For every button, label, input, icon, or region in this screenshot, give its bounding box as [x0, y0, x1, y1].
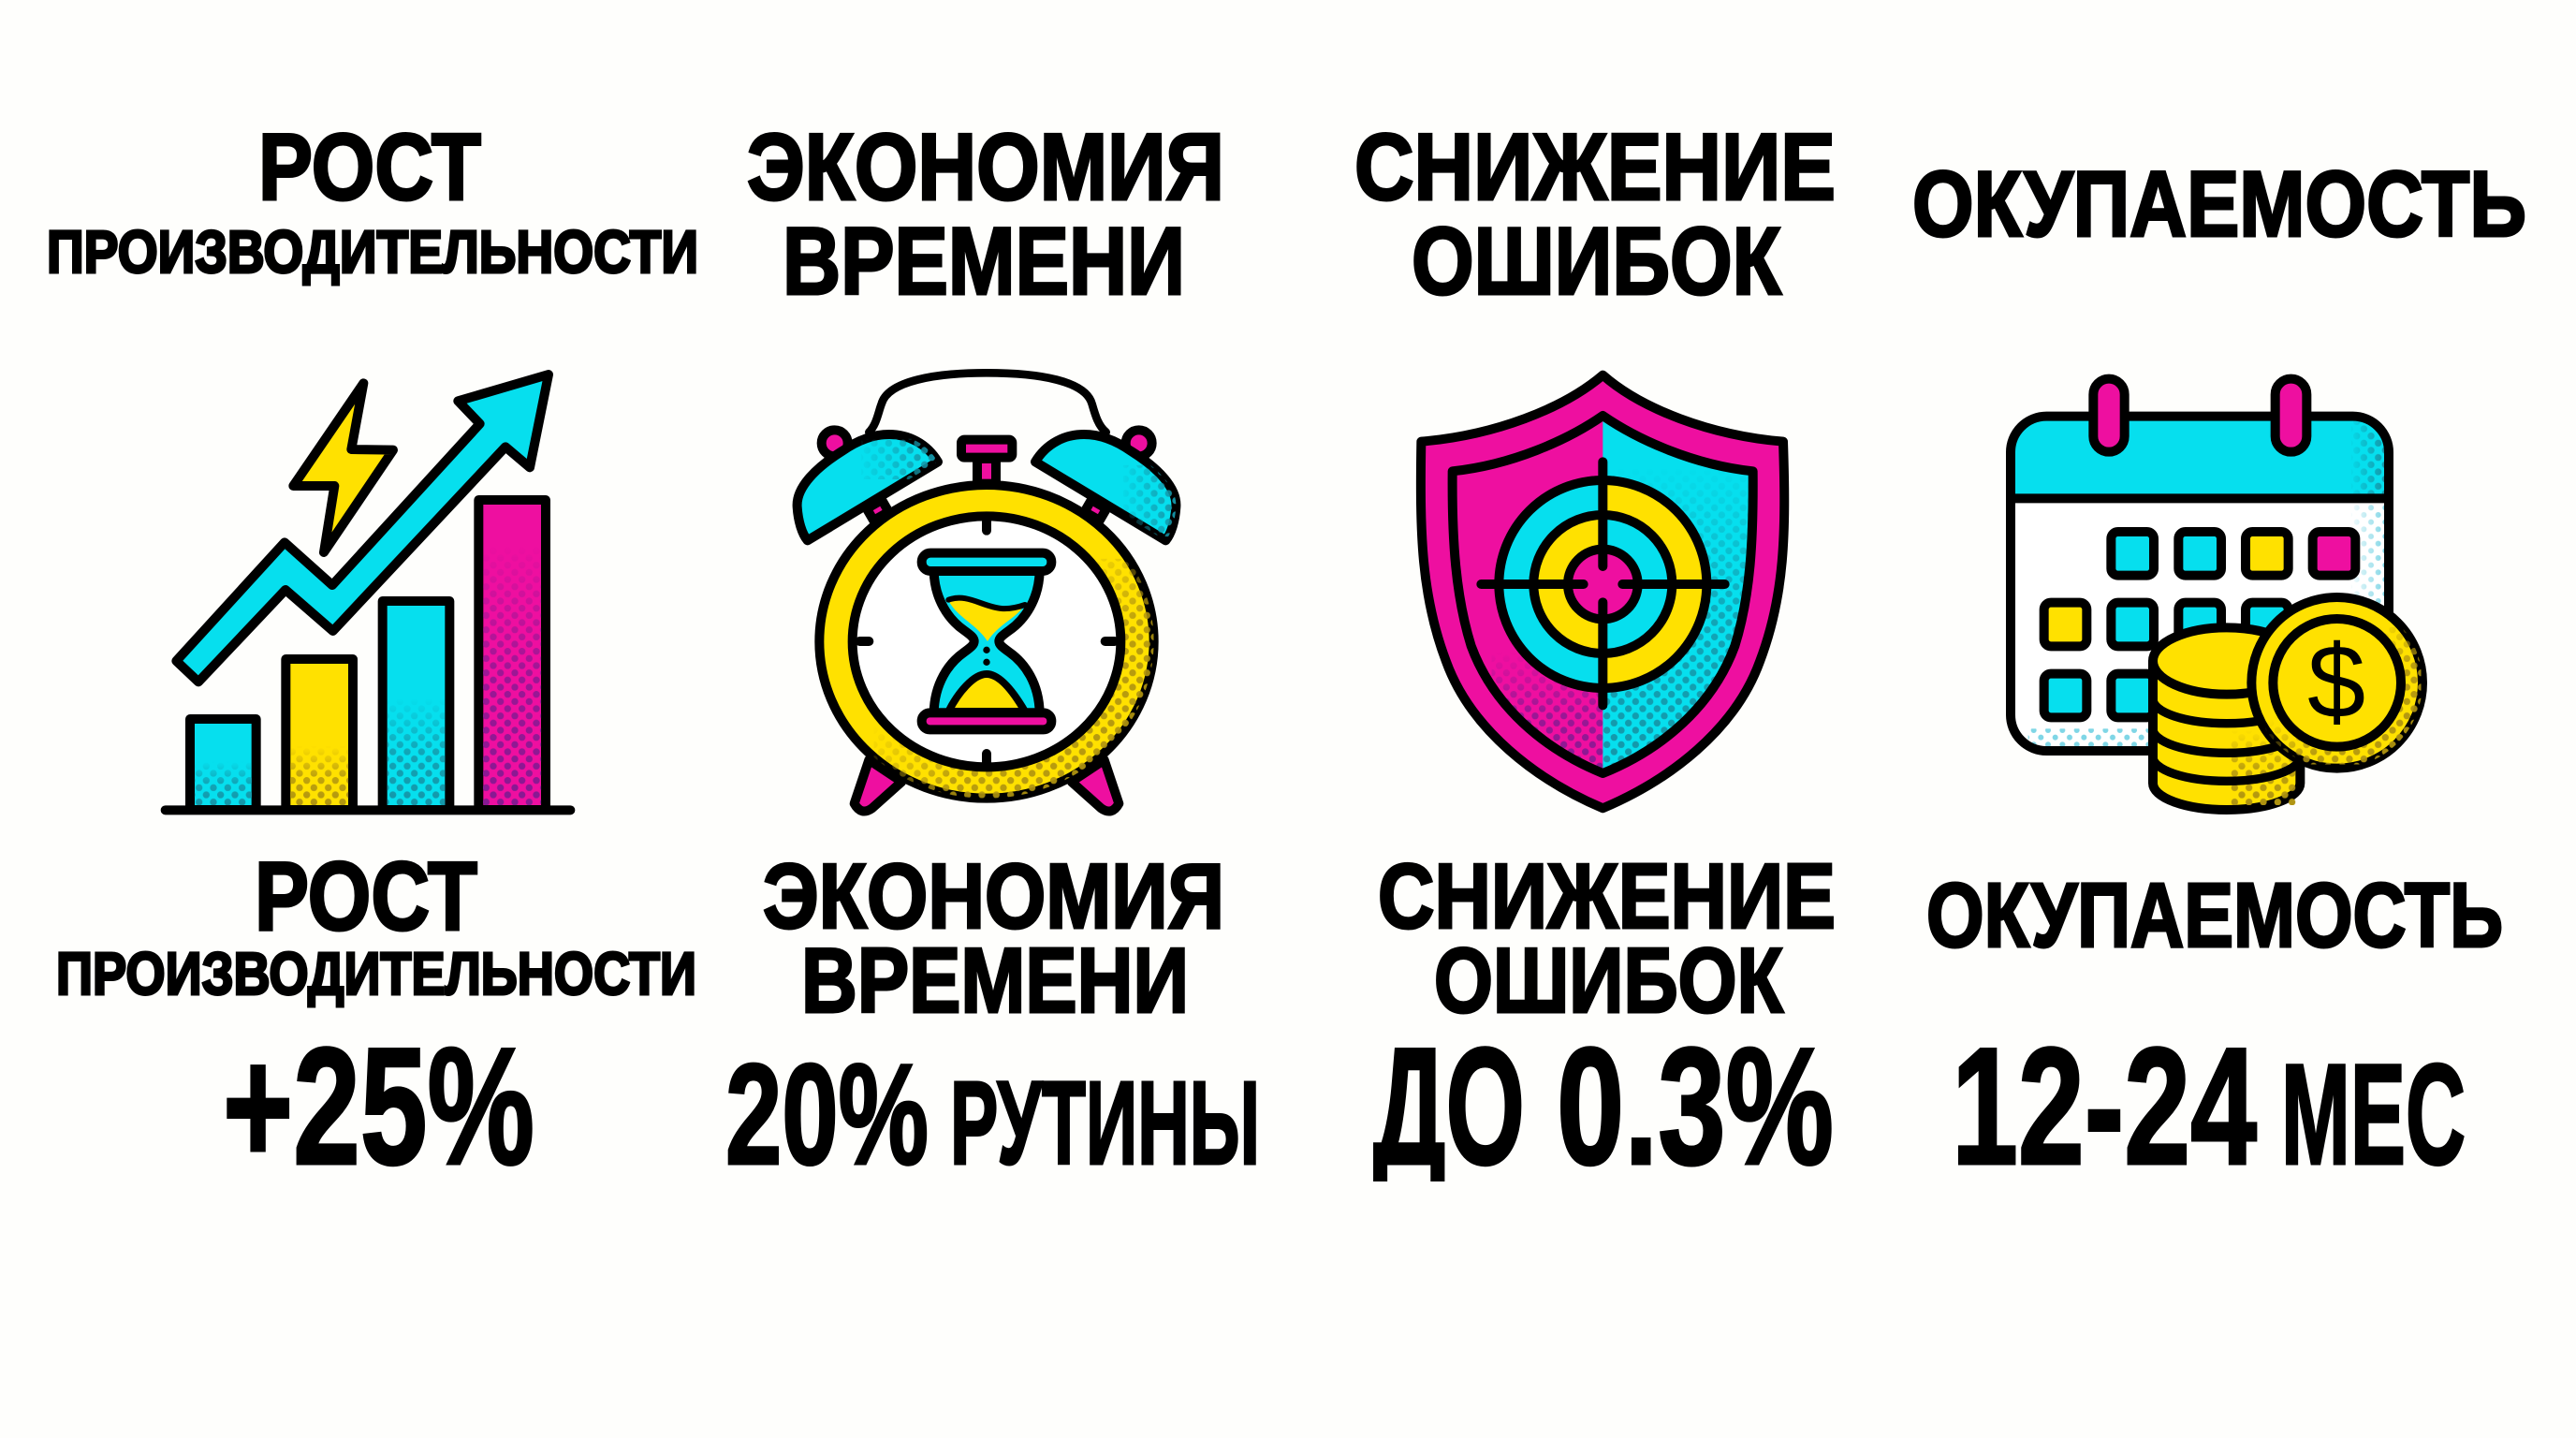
label: экономия времени: ЭКОНОМИЯ	[763, 844, 1224, 947]
heading: рост производительности	[47, 115, 698, 286]
label: рост производительности: РОСТ	[255, 843, 477, 951]
bell knob left	[822, 430, 848, 456]
value: до 0.3%: ДО	[1373, 1013, 1525, 1199]
heading: экономия времени	[747, 115, 1224, 315]
baseline axis	[166, 796, 570, 824]
label: рост производительности: ПРОИЗВОДИТЕЛЬНОСТИ	[56, 940, 696, 1007]
bell knob right	[1126, 430, 1152, 456]
bell left	[798, 434, 938, 540]
heading: снижение ошибок: ОШИБОК	[1412, 208, 1782, 315]
dollar sign: $	[2307, 624, 2365, 741]
clock tick marks	[859, 521, 1115, 763]
bell connector left	[867, 500, 888, 521]
label: снижение ошибок: ОШИБОК	[1434, 929, 1783, 1032]
clock handle	[869, 373, 1106, 433]
shield outer	[1421, 375, 1784, 808]
value: 20% рутины: РУТИНЫ	[950, 1057, 1260, 1189]
calendar day squares	[2044, 532, 2355, 717]
bell connector right	[1085, 500, 1106, 521]
label: снижение ошибок: СНИЖЕНИЕ	[1378, 844, 1836, 947]
coin stack	[2153, 627, 2300, 810]
heading: рост производительности: ПРОИЗВОДИТЕЛЬНОСТИ	[47, 218, 698, 286]
heading: снижение ошибок: СНИЖЕНИЕ	[1354, 115, 1836, 220]
value: до 0.3%: 0.3%	[1557, 1013, 1834, 1199]
crosshair	[1481, 462, 1725, 705]
panel: снижение ошибок	[1354, 115, 1836, 1199]
label: снижение ошибок	[1378, 844, 1836, 1032]
shield inner split	[1451, 414, 1756, 775]
icon: alarm clock with hourglass	[798, 373, 1177, 812]
foot right	[1072, 760, 1119, 812]
bar 1	[190, 719, 256, 810]
icon: calendar with coins	[2011, 379, 2422, 810]
heading: экономия времени: ЭКОНОМИЯ	[747, 115, 1224, 220]
label: рост производительности	[56, 843, 696, 1007]
foot left	[855, 760, 901, 812]
bar 2	[285, 659, 353, 810]
lightning bolt	[293, 383, 393, 552]
panel: окупаемость	[1912, 152, 2526, 1199]
hourglass	[922, 553, 1051, 729]
growth arrow	[176, 374, 549, 682]
label: экономия времени	[763, 844, 1224, 1032]
clock stem button	[961, 440, 1012, 484]
value: 12-24 мес: 12-24	[1952, 1013, 2257, 1199]
value: +25%: +25%	[223, 1013, 534, 1199]
clock ring	[819, 485, 1154, 799]
bell right	[1035, 434, 1177, 540]
icon: shield with target	[1421, 375, 1784, 808]
panel: экономия времени	[725, 115, 1260, 1195]
bar 3	[383, 601, 449, 810]
label: экономия времени: ВРЕМЕНИ	[801, 929, 1189, 1032]
target rings	[1499, 480, 1706, 688]
calendar binding rings	[2093, 379, 2306, 452]
value: 20% рутины	[725, 1034, 1260, 1195]
heading: снижение ошибок	[1354, 115, 1836, 315]
icon: growth bar chart with arrow and lightning	[166, 374, 570, 810]
value: 20% рутины: 20%	[725, 1034, 929, 1195]
heading: экономия времени: ВРЕМЕНИ	[783, 208, 1185, 315]
panel: рост производительности	[47, 115, 698, 1199]
calendar body	[2011, 417, 2389, 751]
bar 4	[478, 500, 546, 810]
big dollar coin	[2251, 597, 2422, 769]
value: до 0.3%	[1373, 1046, 1832, 1181]
heading: рост производительности: РОСТ	[258, 115, 481, 220]
